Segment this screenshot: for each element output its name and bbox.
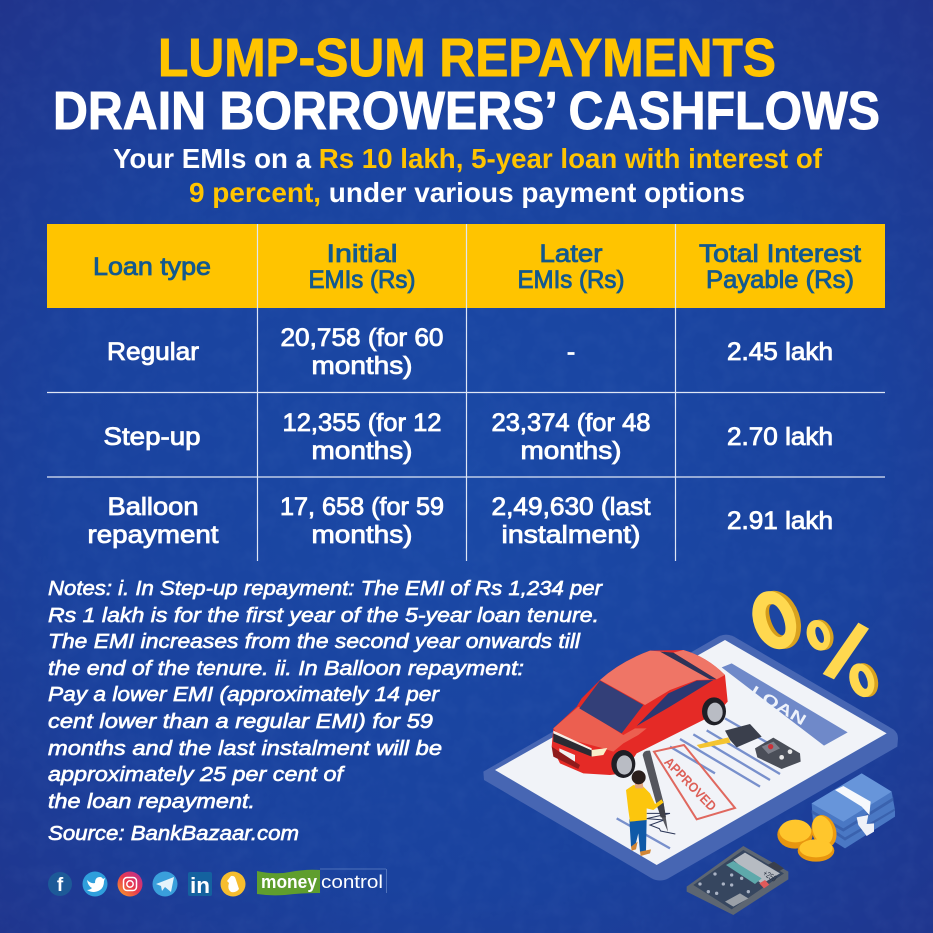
icon: telegram xyxy=(152,872,178,896)
car xyxy=(552,650,728,778)
table xyxy=(47,224,885,561)
row: regular xyxy=(107,324,833,380)
row: balloon repayment: 17, 658 (for 59 xyxy=(280,493,444,521)
torso xyxy=(626,785,663,822)
row: regular: 2.45 lakh xyxy=(727,338,833,366)
head xyxy=(632,770,646,788)
icon: facebook: f xyxy=(57,875,64,896)
calculator xyxy=(687,846,788,915)
notes: Pay a lower EMI (approximately 14 per xyxy=(48,683,440,706)
coins xyxy=(777,812,841,862)
icon: instagram xyxy=(118,872,142,896)
row: step-up: 23,374 (for 48 xyxy=(492,409,650,437)
table header band: EMIs (Rs) xyxy=(518,266,624,294)
pen xyxy=(643,751,668,832)
notes: approximately 25 per cent of xyxy=(48,763,346,786)
social icons xyxy=(48,872,246,898)
row: balloon repayment: months) xyxy=(312,521,412,549)
percent sign xyxy=(745,583,882,701)
icon: twitter xyxy=(82,872,108,896)
table header band: Loan type xyxy=(93,253,211,281)
row: step-up: Step-up xyxy=(104,423,200,451)
logo: moneycontrol xyxy=(257,869,386,895)
notes: cent lower than a regular EMI) for 59 xyxy=(48,710,433,733)
icon: facebook xyxy=(48,872,72,896)
table header band: Initial xyxy=(326,240,398,268)
notes: The EMI increases from the second year onwards till xyxy=(48,630,582,653)
illustration: car loan approval xyxy=(483,583,898,915)
approved stamp xyxy=(654,745,735,819)
icon: linkedin: in xyxy=(190,873,210,898)
row: regular: - xyxy=(567,338,575,366)
calculator: +259 xyxy=(761,868,779,884)
person signing with pen xyxy=(626,751,675,856)
row: balloon repayment xyxy=(88,493,833,549)
icon: koo xyxy=(220,872,246,896)
table header band: EMIs (Rs) xyxy=(308,266,416,294)
row: balloon repayment: instalment) xyxy=(502,521,640,549)
row: regular: Regular xyxy=(107,338,199,366)
loan label xyxy=(722,663,848,746)
money stack xyxy=(812,773,895,848)
source: Source: BankBazaar.com xyxy=(48,822,299,845)
subtitle: 9 percent, under various payment options xyxy=(189,177,745,208)
row: balloon repayment: Balloon xyxy=(108,493,198,521)
row: balloon repayment: 2,49,630 (last xyxy=(492,493,651,521)
title xyxy=(53,28,880,141)
signature xyxy=(647,813,675,834)
title: LUMP-SUM REPAYMENTS xyxy=(158,28,776,88)
logo: moneycontrol: money xyxy=(261,872,317,892)
tablet xyxy=(483,635,898,880)
table header band: Later xyxy=(540,240,602,268)
row: step-up: 12,355 (for 12 xyxy=(282,409,442,437)
notes: the loan repayment. xyxy=(48,790,255,813)
row: regular: months) xyxy=(312,352,412,380)
notes: Rs 1 lakh is for the first year of the 5-year loan tenure. xyxy=(48,604,599,627)
subtitle xyxy=(113,143,823,208)
row: balloon repayment: repayment xyxy=(88,521,219,549)
shoes xyxy=(631,842,651,856)
keys xyxy=(697,724,801,769)
notes: Notes: i. In Step-up repayment: The EMI of Rs 1,234 per xyxy=(48,577,603,600)
approved stamp: APPROVED xyxy=(661,754,720,814)
loan label: LOAN xyxy=(747,683,809,729)
table header band xyxy=(47,224,885,308)
row: step-up xyxy=(104,409,833,465)
document lines xyxy=(617,718,780,848)
legs xyxy=(629,818,647,852)
row: balloon repayment: 2.91 lakh xyxy=(727,507,833,535)
row: regular: 20,758 (for 60 xyxy=(280,324,444,352)
row: step-up: 2.70 lakh xyxy=(727,423,833,451)
row: step-up: months) xyxy=(312,437,412,465)
table header band: Total Interest xyxy=(699,240,861,268)
row: step-up: months) xyxy=(520,437,622,465)
subtitle: Your EMIs on a Rs 10 lakh, 5-year loan with interest of xyxy=(113,143,823,174)
logo: moneycontrol: control xyxy=(321,872,383,892)
notes: months and the last instalment will be xyxy=(48,737,442,760)
table header band: Payable (Rs) xyxy=(706,266,854,294)
notes xyxy=(48,577,603,813)
notes: the end of the tenure. ii. In Balloon repayment: xyxy=(48,657,524,680)
